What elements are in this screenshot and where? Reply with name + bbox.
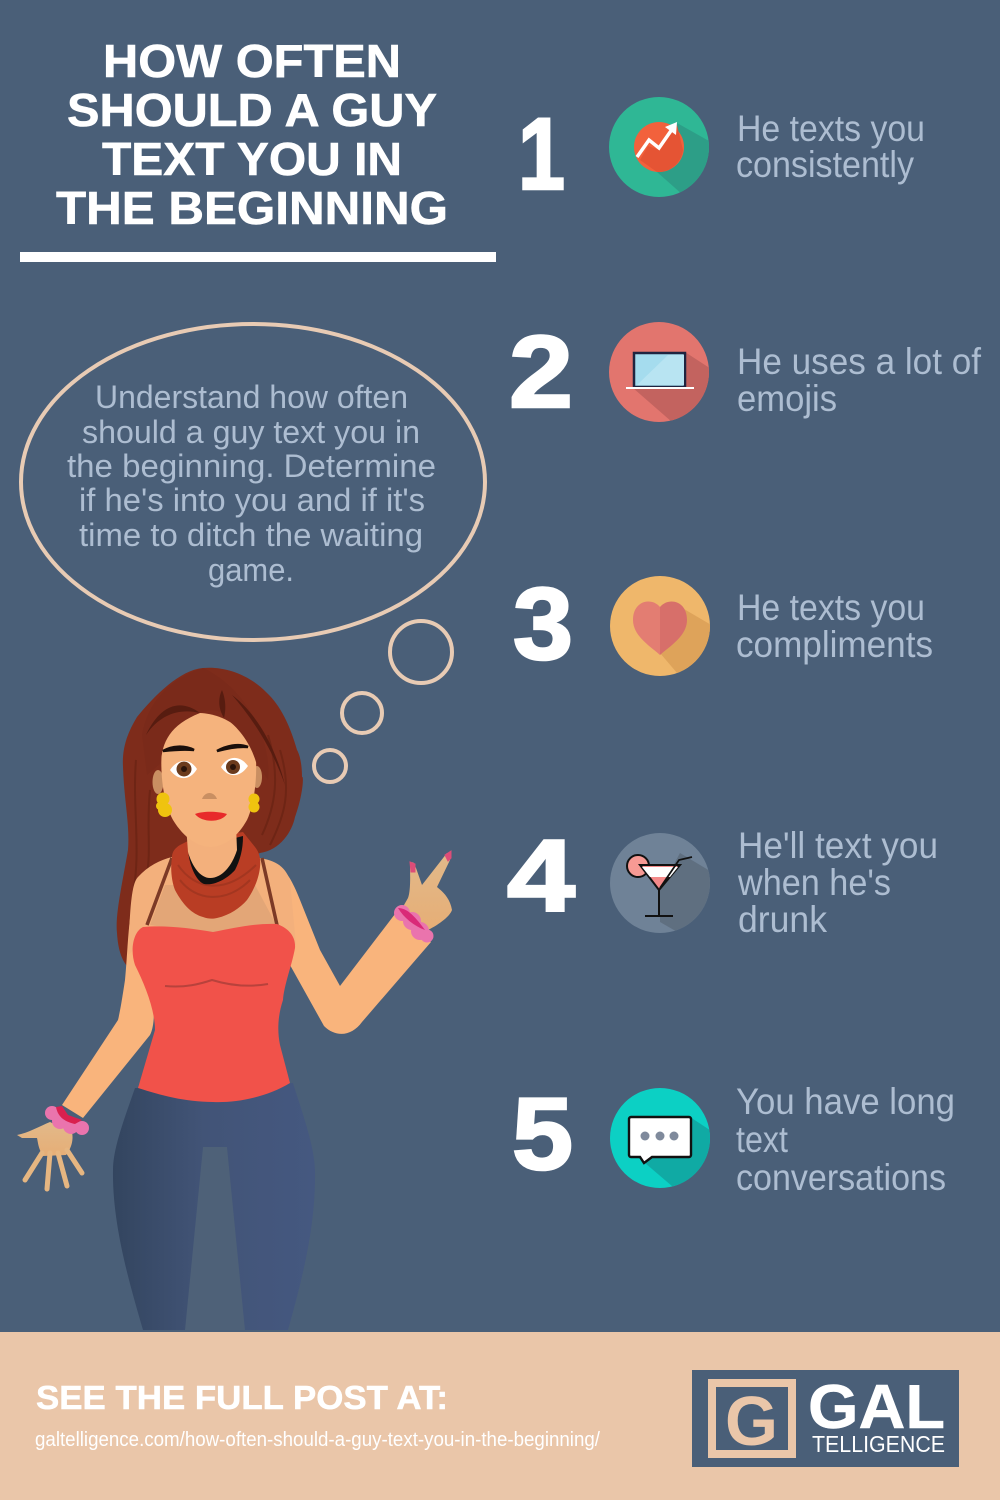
scarf (171, 832, 260, 919)
bubble text: time to ditch the waiting (79, 517, 423, 553)
hair front (142, 668, 268, 780)
left arm (62, 877, 160, 1118)
title: SHOULD A GUY (67, 84, 437, 136)
bubble text: game. (208, 552, 294, 588)
title underline (20, 252, 496, 262)
lower hand scrunchie (45, 1106, 89, 1135)
text (737, 825, 938, 940)
text (737, 341, 982, 419)
fingertips (410, 851, 451, 872)
text: when he's (737, 862, 891, 903)
title: HOW OFTEN (103, 35, 401, 87)
text: compliments (736, 624, 933, 665)
number 5: 5 (512, 1077, 573, 1191)
logo: G (725, 1382, 778, 1460)
neck shadow (188, 836, 243, 884)
text: He texts you (737, 108, 925, 149)
top straps (147, 858, 277, 925)
icon: chat bubble (610, 1088, 710, 1188)
ears (152, 770, 164, 794)
text: drunk (738, 899, 827, 940)
torso skin (128, 857, 296, 955)
eyes (170, 761, 197, 778)
bubble text: Understand how often (95, 379, 408, 415)
title (56, 35, 448, 234)
bubble text: should a guy text you in (82, 414, 420, 450)
text: conversations (736, 1157, 946, 1198)
scarf folds (178, 865, 256, 897)
hair back (117, 668, 303, 966)
text: He texts you (737, 587, 925, 628)
footer url: galtelligence.com/how-often-should-a-guy-text-you-in-the-beginning/ (35, 1429, 600, 1451)
neck (186, 825, 237, 878)
icon: growth chart (609, 97, 709, 197)
logo: GAL (808, 1373, 945, 1442)
number 3: 3 (513, 567, 573, 681)
bubble text: if he's into you and if it's (79, 482, 425, 518)
footer heading: SEE THE FULL POST AT: (36, 1379, 448, 1416)
item 3 (514, 576, 932, 676)
woman illustration (17, 668, 452, 1330)
raised hand scrunchie (394, 905, 434, 942)
face (161, 713, 256, 847)
thought bubble (21, 324, 485, 782)
text (736, 108, 925, 185)
logo: TELLIGENCE (812, 1431, 945, 1457)
item 5 (514, 1087, 953, 1190)
item 1 (522, 97, 923, 197)
icon: laptop (609, 322, 709, 422)
title: THE BEGINNING (56, 182, 448, 234)
top seam (165, 980, 268, 987)
raised hand (400, 853, 452, 930)
text: He'll text you (738, 825, 938, 866)
item 2 (512, 322, 982, 422)
right arm (270, 862, 431, 1034)
text: text (736, 1119, 789, 1160)
icon: cocktail (610, 833, 710, 933)
title: TEXT YOU IN (102, 133, 402, 185)
footer band (0, 1332, 1000, 1500)
lower hand (17, 1122, 82, 1189)
text: He uses a lot of (737, 341, 982, 382)
number 4: 4 (507, 819, 575, 933)
number 1: 1 (518, 97, 565, 211)
hair strands (132, 735, 286, 900)
text (736, 587, 933, 665)
jeans (113, 1083, 315, 1330)
eyebrows (163, 745, 248, 751)
logo (692, 1370, 959, 1467)
bubble text: the beginning. Determine (67, 448, 436, 484)
text (736, 1081, 955, 1198)
text: consistently (736, 144, 914, 185)
bubble text (67, 379, 436, 588)
number 2: 2 (509, 315, 573, 429)
text: You have long (736, 1081, 955, 1122)
earrings (156, 792, 260, 817)
nose (202, 793, 217, 799)
text: emojis (737, 378, 837, 419)
item 4 (507, 831, 936, 933)
red top (133, 924, 295, 1102)
leg gap tone (185, 1147, 245, 1330)
lips (195, 812, 227, 821)
icon: heart (610, 576, 710, 676)
